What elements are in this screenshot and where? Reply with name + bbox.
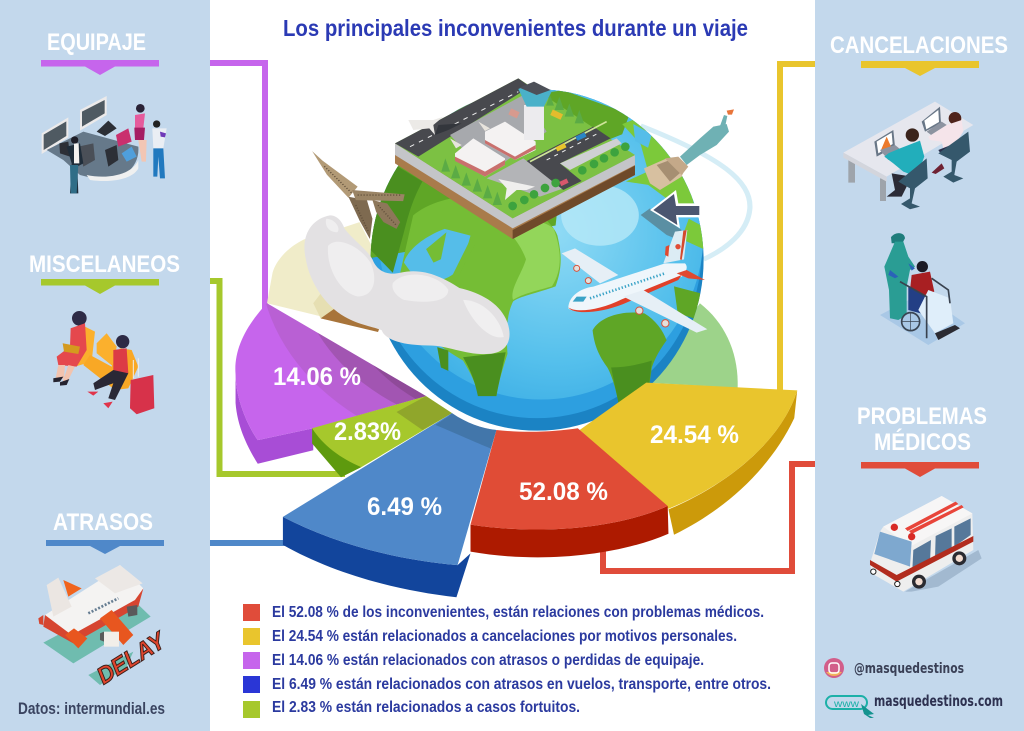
pie labels xyxy=(273,363,739,521)
panel: left sidebar xyxy=(0,0,210,731)
delay label: DELAY xyxy=(92,626,172,690)
icon: patient in wheelchair xyxy=(880,233,965,345)
header: miscelaneos: MISCELANEOS xyxy=(29,251,180,278)
icon: office workers xyxy=(843,102,973,209)
woman xyxy=(136,104,145,113)
icon: delayed plane xyxy=(38,565,172,690)
trees xyxy=(508,142,630,210)
header: problemas medicos: PROBLEMAS xyxy=(857,403,987,430)
panel: right sidebar xyxy=(815,0,1024,731)
3D pie chart with globe xyxy=(235,56,797,597)
pie labels: 6.49 % xyxy=(367,493,442,521)
legend item: 52.08: El 52.08 % de los inconvenientes, están relaciones con problemas médicos. xyxy=(272,604,764,621)
header: equipaje: EQUIPAJE xyxy=(47,29,146,56)
man 1 xyxy=(67,143,83,193)
swoosh xyxy=(641,126,750,259)
globe xyxy=(363,65,707,431)
hangars xyxy=(455,138,505,177)
arrow xyxy=(641,190,701,238)
illustration: airport diorama xyxy=(395,78,635,239)
header: miscelaneos xyxy=(29,251,180,294)
legend item: 24.54: El 24.54 % están relacionados a cancelaciones por motivos personales. xyxy=(272,628,737,645)
legend item: 2.83: El 2.83 % están relacionados a casos fortuitos. xyxy=(272,699,580,716)
illustration: statue, arrow and airplane xyxy=(562,109,734,333)
cloud xyxy=(304,215,510,354)
icon: ambulance xyxy=(870,496,982,592)
slice: green 2.83 xyxy=(312,396,452,477)
man 2 xyxy=(153,120,160,128)
header: equipaje xyxy=(41,29,159,75)
icon: instagram xyxy=(824,658,844,678)
legend item: 14.06: El 14.06 % están relacionados con atrasos o perdidas de equipaje. xyxy=(272,652,704,669)
icon: www cursor xyxy=(826,696,874,718)
legend xyxy=(243,604,771,718)
connector lines xyxy=(210,63,815,571)
backdrop wedges xyxy=(267,222,738,388)
runway xyxy=(395,78,530,157)
icon: waiting passengers xyxy=(53,311,154,414)
header: cancelaciones xyxy=(830,32,1008,76)
source note: Datos: intermundial.es xyxy=(18,699,165,718)
title: Los principales inconvenientes durante un viaje xyxy=(283,15,748,41)
airplanes and cars xyxy=(408,117,443,135)
instagram handle: @masquedestinos xyxy=(854,661,964,677)
illustration: Eiffel tower xyxy=(312,151,405,239)
header: atrasos xyxy=(46,509,164,554)
slice: blue 6.49 xyxy=(283,413,496,597)
control tower xyxy=(524,105,544,140)
header: atrasos: ATRASOS xyxy=(53,509,153,536)
pie labels: 52.08 % xyxy=(519,478,608,506)
pie labels: 24.54 % xyxy=(650,421,739,449)
airplane xyxy=(562,230,707,333)
icon: www cursor: www xyxy=(833,699,860,710)
icon: baggage carousel xyxy=(42,96,167,193)
pie labels: 14.06 % xyxy=(273,363,361,391)
statue of liberty xyxy=(644,109,734,190)
continents xyxy=(363,90,630,259)
header: problemas medicos xyxy=(857,403,987,477)
pie labels: 2.83% xyxy=(334,418,401,446)
slice: purple 14.06 xyxy=(235,303,426,464)
slice: yellow 24.54 xyxy=(580,383,797,535)
header: problemas medicos: MÉDICOS xyxy=(874,428,971,456)
slice: red 52.08 xyxy=(470,428,668,557)
legend item: 6.49: El 6.49 % están relacionados con atrasos en vuelos, transporte, entre otros. xyxy=(272,676,771,693)
